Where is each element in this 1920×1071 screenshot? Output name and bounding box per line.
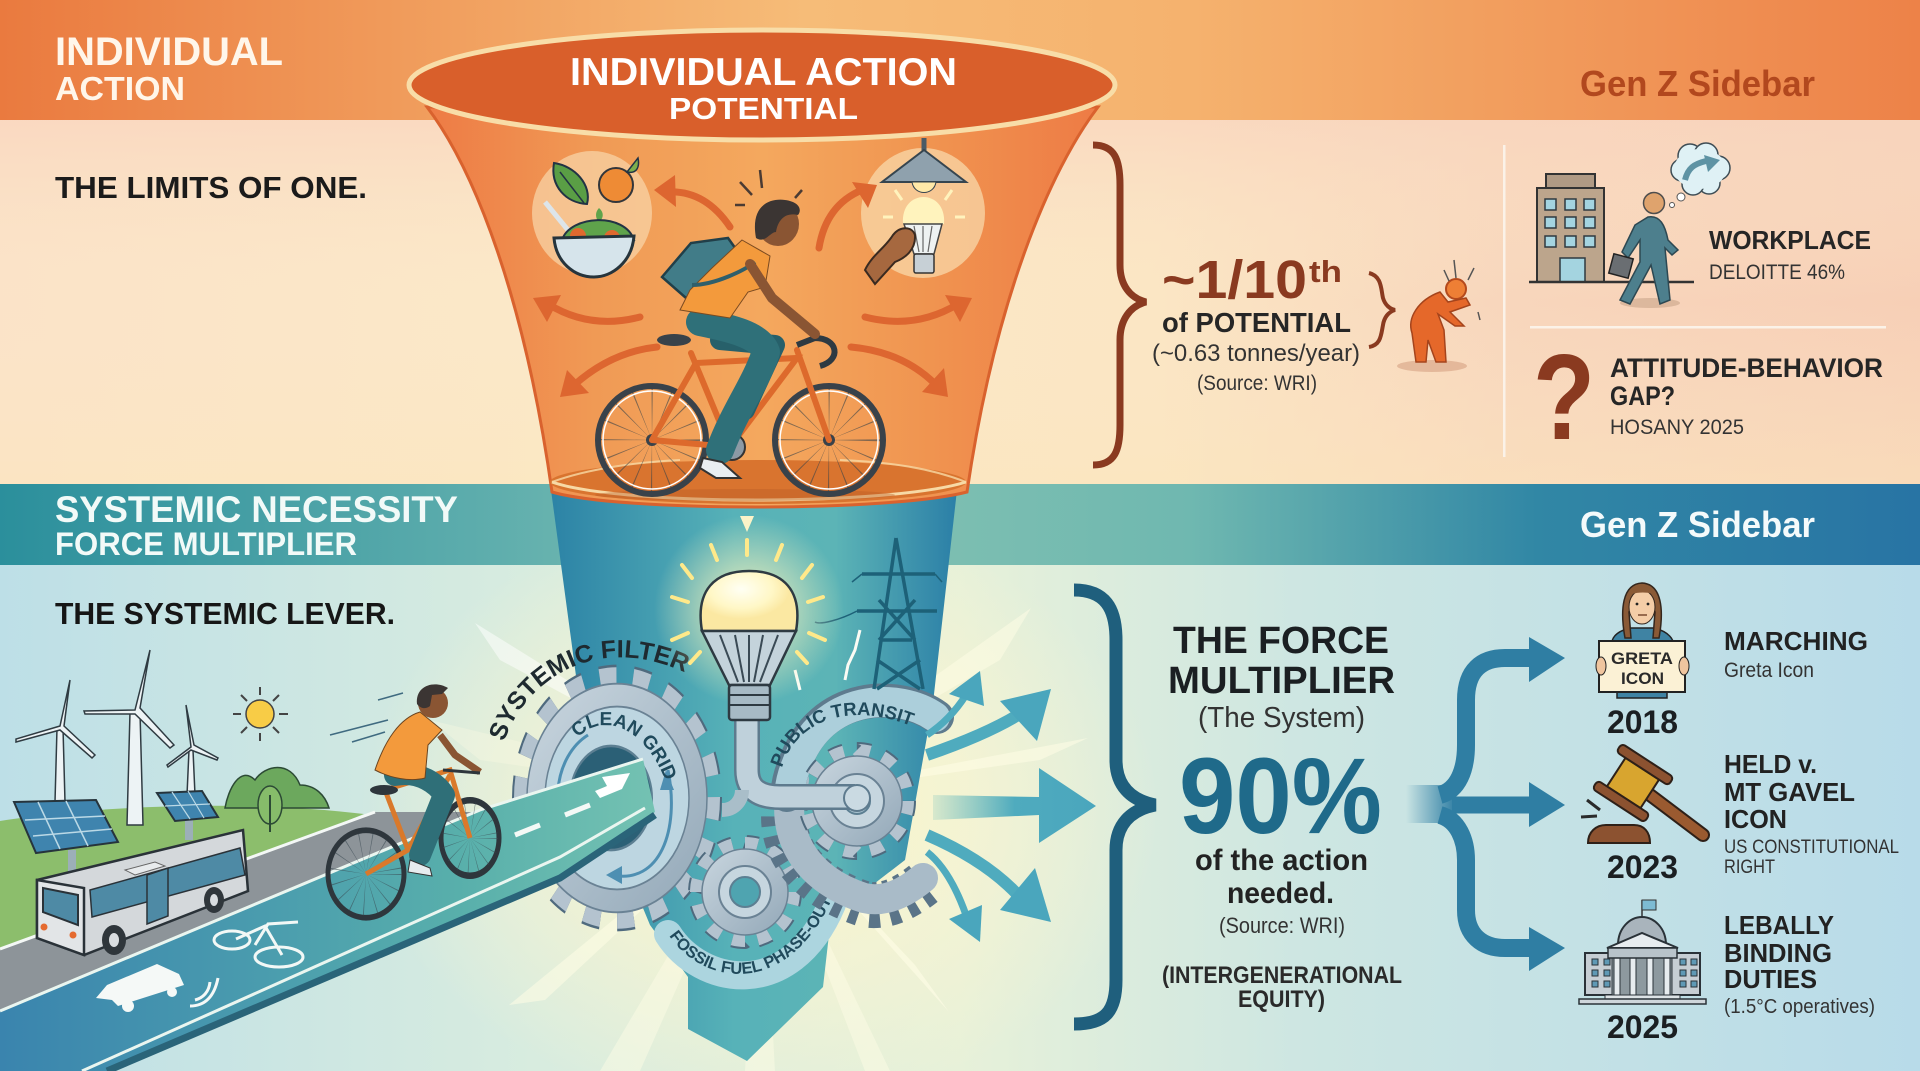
brace: upper: [1093, 145, 1146, 465]
text: held v mt: MT GAVEL: [1724, 777, 1855, 807]
gear: lower C-ring teeth: [784, 800, 928, 905]
text: marching: MARCHING: [1724, 626, 1868, 656]
head: [755, 200, 800, 246]
funnel body: [427, 107, 1098, 507]
heading: individual action: ACTION: [55, 70, 185, 107]
text: attitude behavior gap: HOSANY 2025: [1610, 416, 1744, 439]
icon: greta with sign: ICON: [1621, 670, 1664, 688]
gear: large with ring: [520, 675, 714, 921]
gear: right: [805, 749, 909, 853]
stat: one tenth of potential: ~1/10: [1162, 250, 1307, 310]
stat: force multiplier 90 percent: (The System): [1198, 702, 1365, 734]
icon: wind turbines: [16, 650, 218, 825]
heading: gen z sidebar upper: Gen Z Sidebar: [1580, 63, 1815, 104]
text: attitude behavior gap: ATTITUDE-BEHAVIOR: [1610, 353, 1883, 383]
text: legally binding duties: (1.5°C operatives): [1724, 996, 1875, 1018]
text: the systemic lever: THE SYSTEMIC LEVER.: [55, 596, 395, 631]
icon: bushes and tree: [225, 768, 329, 832]
icon: glowing bulb: [654, 515, 844, 720]
brace: small: [1369, 273, 1395, 347]
near leg: [700, 322, 766, 450]
stat: one tenth of potential: (~0.63 tonnes/year): [1152, 340, 1360, 367]
text: marching: Greta Icon: [1724, 659, 1814, 682]
text: legally binding duties: DUTIES: [1724, 964, 1817, 994]
heading: systemic necessity: SYSTEMIC NECESSITY: [55, 489, 458, 530]
text: legally binding duties: [1724, 910, 1875, 1018]
icon: government building: [1579, 900, 1706, 1004]
stat: one tenth of potential: (Source: WRI): [1197, 372, 1317, 395]
far leg: [720, 340, 775, 410]
text: marching: [1724, 626, 1868, 682]
rear wheel: [598, 386, 706, 494]
icon: bus road marking: [96, 964, 218, 1012]
front wheel: [775, 386, 883, 494]
heading: individual action: INDIVIDUAL: [55, 30, 283, 74]
stat: force multiplier 90 percent: (INTERGENERATIONAL: [1162, 962, 1402, 989]
heading: individual action: [55, 30, 283, 107]
stat: force multiplier 90 percent: of the action: [1195, 844, 1368, 877]
funnel rim: [409, 30, 1115, 140]
icon: greta with sign: [1596, 583, 1689, 698]
year 2023: 2023: [1607, 849, 1678, 885]
icon: question mark: ?: [1533, 329, 1595, 465]
shoe: [700, 458, 740, 478]
stat: force multiplier 90 percent: 90%: [1179, 735, 1382, 856]
text: held v mt: US CONSTITUTIONAL: [1724, 837, 1899, 858]
heading: systemic necessity: [55, 489, 458, 562]
stat: force multiplier 90 percent: [1162, 620, 1402, 1013]
stat: force multiplier 90 percent: EQUITY): [1238, 986, 1325, 1013]
icon: sun: [233, 687, 288, 741]
arrows: timeline branches: [1406, 637, 1565, 971]
road: cycle lane: [0, 759, 655, 1071]
text: the limits of one: THE LIMITS OF ONE.: [55, 170, 367, 205]
text: held v mt: ICON: [1724, 804, 1787, 834]
lower funnel body: [551, 490, 957, 1061]
stress marks: [735, 170, 802, 205]
arm: [750, 264, 815, 334]
gear: lower C-ring: [789, 780, 923, 899]
icon: thought cloud with arrow: [1671, 143, 1730, 195]
icon: greta with sign: GRETA: [1611, 650, 1673, 668]
arrow: funnel drop: [740, 516, 754, 532]
icon: power pylon: [815, 538, 942, 689]
icon: electric sparks: [795, 630, 860, 690]
divider vertical: [1503, 145, 1506, 457]
funnel floor: [550, 460, 966, 504]
icon: office building and worker: [1529, 174, 1694, 308]
icon: food circle: [532, 151, 652, 277]
stat: force multiplier 90 percent: MULTIPLIER: [1168, 660, 1395, 702]
road white line: [0, 812, 375, 949]
background: upper panel: [0, 120, 1920, 484]
label: fossil fuel phase-out: FOSSIL FUEL PHASE-OUT: [670, 900, 830, 974]
arrows: teal output arrows: [927, 671, 1096, 942]
landscape: hill: [0, 806, 364, 950]
text: legally binding duties: LEBALLY: [1724, 910, 1834, 940]
upper funnel: [409, 30, 1115, 507]
funnel title: [570, 51, 957, 126]
text: workplace: WORKPLACE: [1709, 225, 1871, 255]
figure: cyclist on lane: [328, 684, 499, 918]
icon: bike road marking: [214, 922, 303, 967]
text: held v mt: RIGHT: [1724, 857, 1775, 878]
road: gray carriageway: [0, 812, 500, 1015]
funnel title: POTENTIAL: [669, 91, 858, 126]
stat: one tenth of potential: of POTENTIAL: [1162, 307, 1351, 338]
label: systemic filter: SYSTEMIC FILTER: [490, 640, 689, 740]
floor shadow: [595, 489, 895, 501]
icon: bus: [37, 830, 248, 955]
icon: solar panels: [14, 791, 218, 884]
brace: lower: [1074, 590, 1155, 1024]
text: workplace: DELOITTE 46%: [1709, 261, 1845, 284]
band: public transit outline: [787, 701, 937, 795]
torso: [680, 240, 770, 318]
figure: cyclist: [598, 170, 883, 494]
text: attitude behavior gap: [1610, 353, 1883, 439]
icon: exhausted person: [1397, 260, 1480, 372]
background: upper header band: [0, 0, 1920, 120]
arrows: radiating effort: [533, 175, 972, 397]
heading: gen z sidebar lower: Gen Z Sidebar: [1580, 504, 1815, 545]
background: lower panel: [0, 510, 1920, 1071]
funnel title: INDIVIDUAL ACTION: [570, 51, 957, 94]
icon: light bulb and lamp circle: [861, 138, 985, 284]
stat: force multiplier 90 percent: THE FORCE: [1173, 620, 1389, 662]
icon: pipe to bulb: [722, 720, 870, 811]
text: workplace: [1709, 225, 1871, 284]
stat: one tenth of potential: [1152, 250, 1360, 395]
text: legally binding duties: BINDING: [1724, 938, 1832, 968]
text: held v mt: HELD v.: [1724, 749, 1817, 779]
text: held v mt: [1724, 749, 1899, 878]
label: public transit: PUBLIC TRANSIT: [770, 702, 916, 767]
label band: fossil fuel phase-out: [668, 904, 832, 975]
label: clean grid: CLEAN GRID: [572, 712, 676, 778]
text: attitude behavior gap: GAP?: [1610, 381, 1675, 411]
heading: systemic necessity: FORCE MULTIPLIER: [55, 526, 357, 562]
year 2018: 2018: [1607, 704, 1678, 740]
stat: one tenth of potential: th: [1309, 254, 1342, 289]
stat: force multiplier 90 percent: needed.: [1227, 877, 1334, 910]
band: public transit: [789, 702, 935, 795]
stat: force multiplier 90 percent: (Source: WRI): [1219, 913, 1345, 938]
backpack: [662, 238, 738, 298]
gear: small bottom: [695, 842, 795, 942]
bike frame: [652, 350, 829, 447]
divider horizontal: [1530, 326, 1886, 328]
year 2025: 2025: [1607, 1009, 1678, 1045]
icon: gavel: [1581, 743, 1703, 843]
background: lower header band: [0, 484, 1920, 565]
